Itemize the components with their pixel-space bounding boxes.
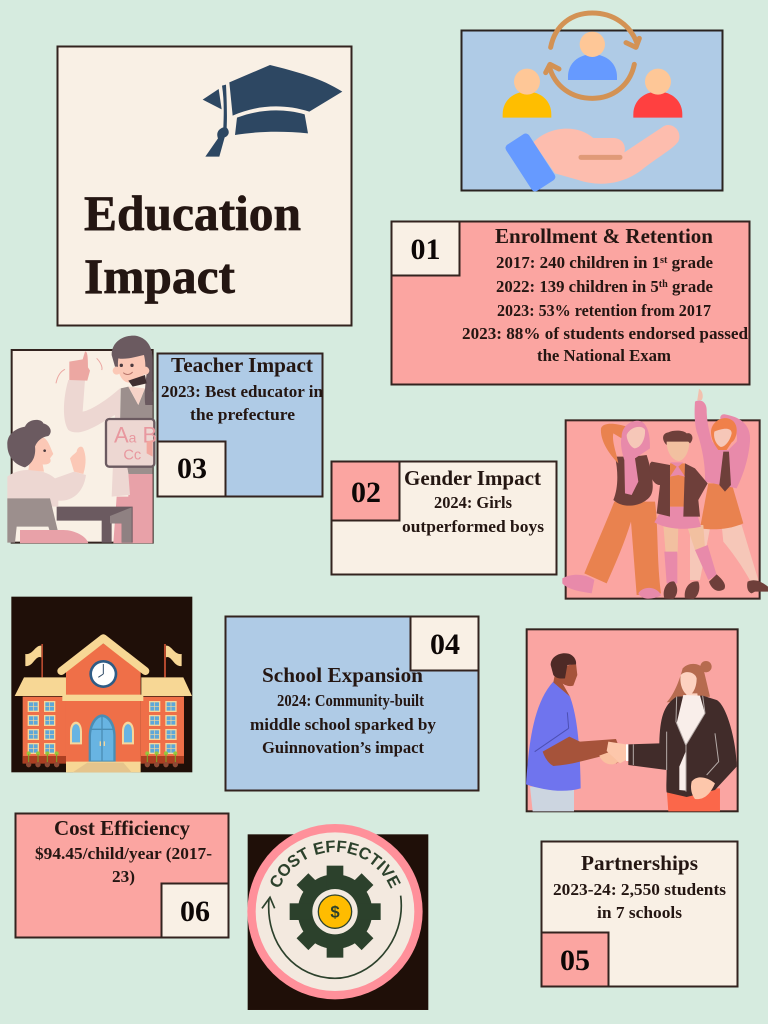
icon: person yellow — [503, 69, 551, 118]
center girl — [663, 525, 678, 553]
panel: 01 enrollment and retention — [392, 222, 750, 384]
heading: Cost Efficiency — [54, 816, 190, 840]
dollar sign: $ — [330, 903, 340, 922]
data lines — [553, 880, 727, 922]
data lines — [35, 844, 212, 886]
panel: 05 partnerships — [542, 842, 738, 986]
heading: Enrollment & Retention — [495, 224, 713, 248]
door — [89, 714, 116, 763]
data lines: grade — [667, 253, 713, 272]
number 03: 03 — [177, 452, 207, 485]
data lines: middle school sparked by — [250, 715, 437, 734]
heading: Gender Impact — [404, 466, 541, 490]
data lines: the National Exam — [537, 346, 671, 365]
icon: circular arrow — [262, 896, 401, 978]
teacher hand — [69, 352, 90, 381]
data lines: st — [660, 255, 668, 266]
panel: 02 gender impact — [332, 462, 556, 574]
data lines: in 7 schools — [597, 903, 683, 922]
data lines: 2023: 53% retention from 2017 — [497, 301, 711, 320]
icon: person blue — [568, 32, 617, 80]
data lines: outperformed boys — [402, 517, 545, 536]
data lines: 2017: 240 children in 1 — [496, 253, 656, 272]
panel: 06 cost efficiency — [16, 814, 228, 938]
icon: cycle arrows — [546, 13, 639, 98]
panel: title — [58, 46, 352, 326]
data lines: 2022: 139 children in 5 — [496, 277, 656, 296]
main building — [66, 700, 141, 763]
panel: 04 school expansion — [226, 616, 478, 790]
icon: person red — [633, 69, 682, 118]
left girl — [584, 502, 661, 595]
alphabet board: Cc — [123, 447, 141, 463]
icon: gear — [290, 866, 381, 958]
illustration: school building — [11, 597, 192, 772]
data lines: the prefecture — [190, 405, 295, 424]
data lines — [161, 382, 323, 424]
heading: Partnerships — [581, 851, 698, 875]
heading: Teacher Impact — [171, 353, 313, 377]
right girl — [722, 525, 758, 583]
data lines — [402, 493, 545, 536]
windows — [28, 701, 177, 754]
teacher trousers — [113, 474, 153, 543]
heading: School Expansion — [262, 663, 423, 687]
data lines: 2024: Girls — [434, 493, 513, 512]
data lines: $94.45/child/year (2017- — [35, 844, 212, 863]
alphabet board: Aa B — [114, 423, 157, 448]
flags — [25, 644, 182, 677]
panel: 03 teacher impact — [158, 353, 323, 496]
number 05: 05 — [560, 944, 590, 977]
data lines: Guinnovation’s impact — [262, 738, 424, 757]
number 02: 02 — [351, 476, 381, 509]
data lines: 2023-24: 2,550 students — [553, 880, 727, 899]
icon: open hand — [504, 125, 679, 193]
illustration: teacher and student — [7, 336, 157, 543]
steps — [66, 762, 141, 772]
illustration: community hand — [462, 13, 722, 193]
illustration: handshake — [526, 629, 738, 811]
teacher cardigan and arm — [64, 380, 130, 497]
data lines: 2024: Community-built — [277, 691, 424, 710]
teacher hair back — [112, 336, 153, 405]
table — [57, 507, 133, 543]
data lines: 23) — [112, 867, 135, 886]
data lines: 2023: Best educator in — [161, 382, 323, 401]
heading: Education: Education — [84, 185, 301, 241]
clock — [89, 660, 117, 688]
data lines — [462, 253, 748, 365]
icon: graduation cap — [203, 65, 342, 157]
illustration: three students — [562, 389, 768, 599]
data lines — [250, 691, 437, 757]
number 06: 06 — [180, 895, 210, 928]
number 04: 04 — [430, 628, 460, 661]
left man — [530, 787, 574, 811]
heading: Impact: Impact — [84, 248, 235, 304]
curved label: COST EFFECTIVE — [270, 840, 401, 889]
alphabet board — [106, 419, 157, 467]
data lines: th — [659, 279, 668, 290]
illustration: cost effective badge — [247, 824, 428, 1010]
right woman — [667, 788, 720, 811]
number 01: 01 — [410, 233, 440, 266]
student — [7, 470, 86, 507]
teacher vest — [120, 387, 153, 474]
wings — [23, 697, 66, 763]
data lines: grade — [668, 277, 713, 296]
data lines: 2023: 88% of students endorsed passed — [462, 324, 748, 343]
teacher face — [113, 367, 121, 375]
